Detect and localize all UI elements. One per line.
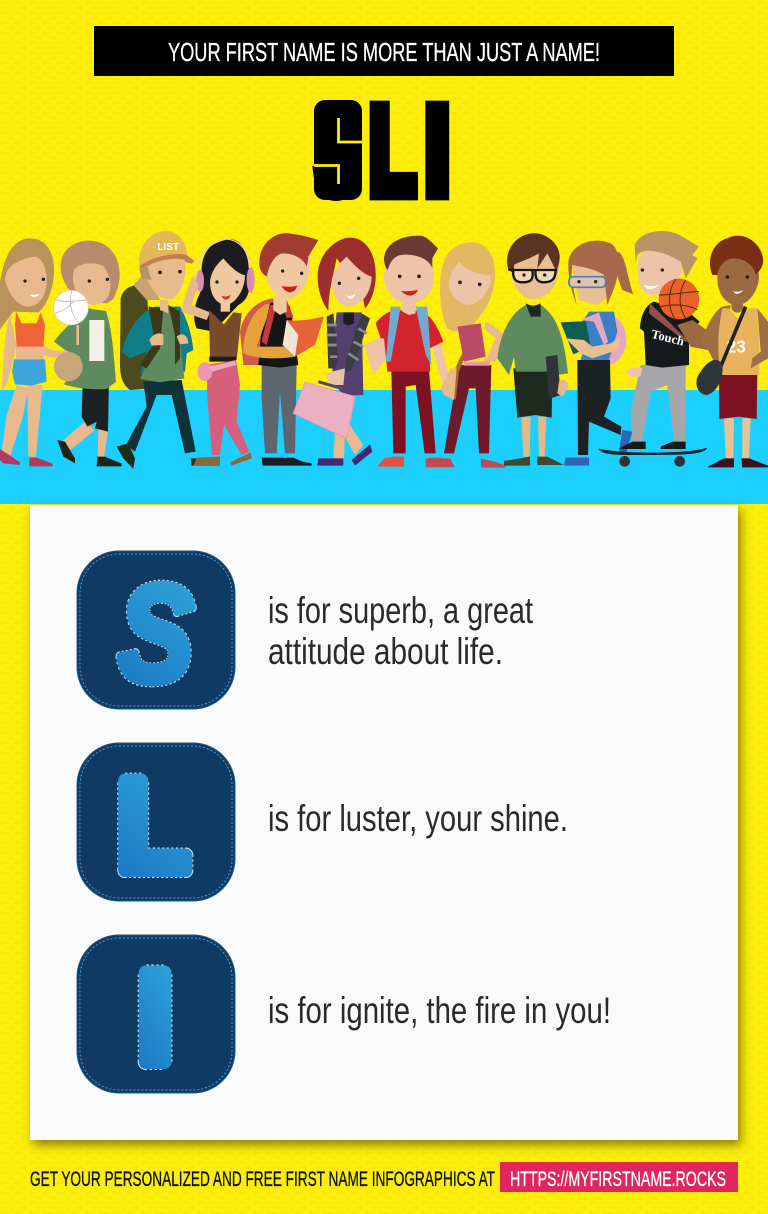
student 7	[364, 236, 454, 467]
right six students	[364, 231, 768, 468]
badge: letter I: I	[137, 944, 173, 1090]
student 4	[182, 239, 255, 466]
text: I meaning: is for ignite, the fire in you!	[268, 990, 611, 1031]
student 10	[561, 241, 633, 466]
student 2	[54, 241, 122, 466]
student 12: 23	[727, 336, 746, 356]
title	[314, 81, 450, 220]
footer link button	[500, 1162, 738, 1192]
title: S	[315, 88, 357, 219]
badge: letter L: L	[117, 753, 190, 898]
badge: letter S: S	[118, 556, 194, 711]
student 3: LIST	[157, 242, 179, 253]
text: S meaning: attitude about life.	[268, 631, 503, 672]
white content panel	[30, 505, 738, 1140]
text: S meaning: is for superb, a great	[268, 590, 534, 631]
title: L	[369, 81, 416, 219]
badge: letter L	[77, 743, 235, 901]
group of twelve students	[0, 231, 768, 469]
title: I	[425, 82, 450, 220]
text: S meaning	[268, 590, 534, 672]
badge: letter I	[77, 935, 235, 1093]
footer call to action: GET YOUR PERSONALIZED AND FREE FIRST NAME INFOGRAPHICS AT	[30, 1168, 495, 1191]
text: L meaning: is for luster, your shine.	[268, 798, 568, 839]
student 3	[117, 231, 220, 469]
student 6	[293, 238, 376, 466]
student 1	[0, 238, 80, 466]
student 5	[240, 233, 324, 466]
blue floor band	[0, 390, 768, 504]
student 8	[426, 242, 507, 468]
student 11	[598, 231, 714, 467]
badge: letter I: I	[137, 944, 173, 1090]
left six students	[0, 231, 376, 469]
badge: letter S: S	[118, 556, 194, 711]
badge: letter L: L	[117, 753, 190, 898]
student 12	[696, 236, 768, 467]
header bar	[94, 26, 674, 76]
badge: letter S	[77, 551, 235, 711]
header bar: YOUR FIRST NAME IS MORE THAN JUST A NAME!	[168, 37, 600, 67]
student 9	[497, 233, 568, 466]
student 11: Touch	[650, 327, 686, 349]
